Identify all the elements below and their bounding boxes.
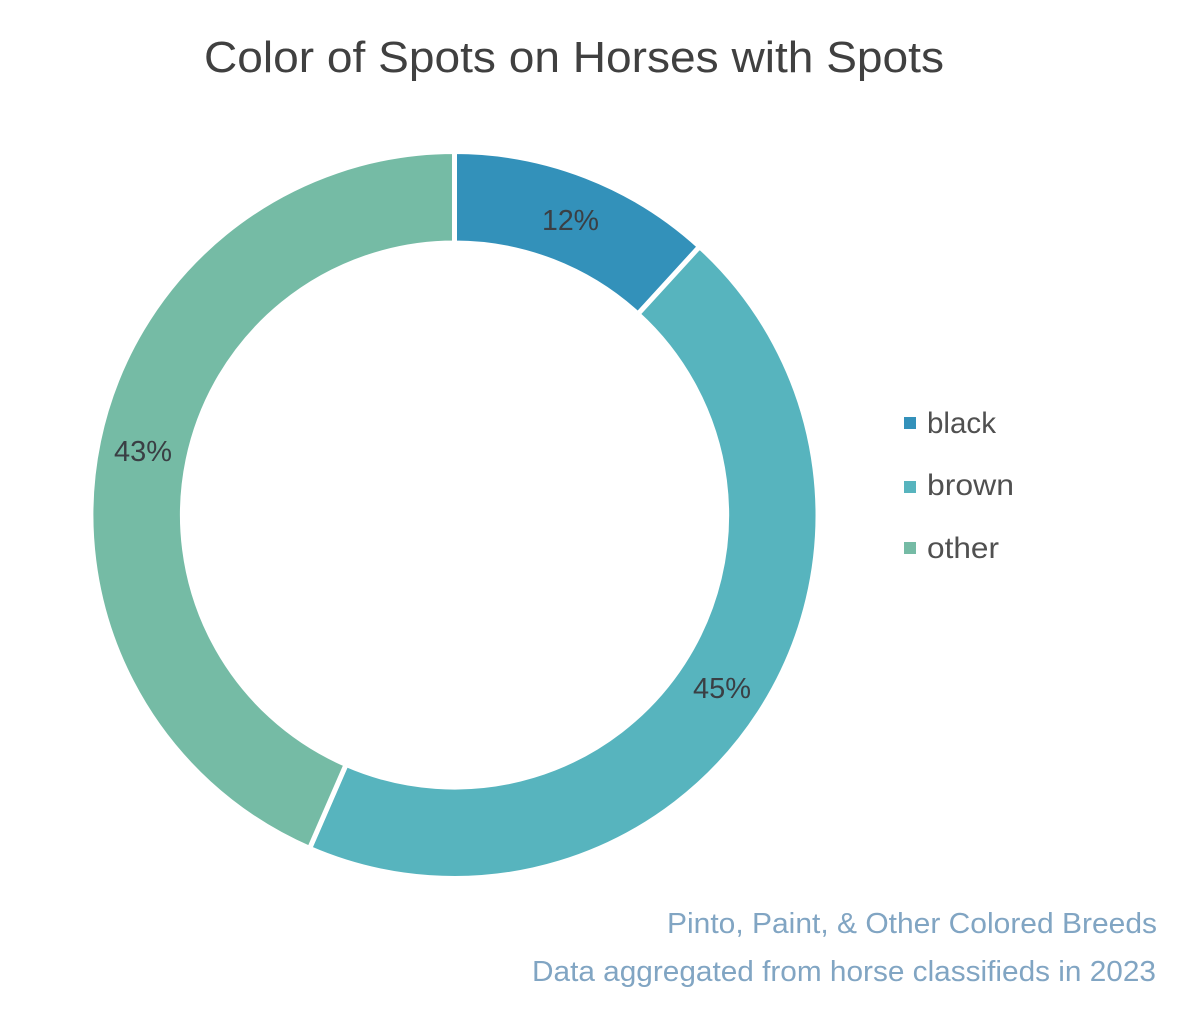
data label: 45%: 45% xyxy=(693,673,751,705)
legend xyxy=(904,407,1014,565)
segment: other 43% xyxy=(91,152,454,848)
source note xyxy=(532,908,1157,988)
segment: black 12% xyxy=(454,152,700,314)
legend item: brown: brown xyxy=(927,469,1014,502)
title: Color of Spots on Horses with Spots xyxy=(204,33,944,82)
note line 2: Data aggregated from horse classifieds in 2023 xyxy=(532,956,1156,988)
legend item: other: other xyxy=(927,532,999,565)
donut chart xyxy=(91,152,818,879)
segment: brown 45% xyxy=(310,247,818,879)
data label: 43%: 43% xyxy=(114,436,172,468)
note line 1: Pinto, Paint, & Other Colored Breeds xyxy=(667,908,1157,940)
data label: 12%: 12% xyxy=(542,205,599,237)
legend item: black: black xyxy=(927,407,997,440)
